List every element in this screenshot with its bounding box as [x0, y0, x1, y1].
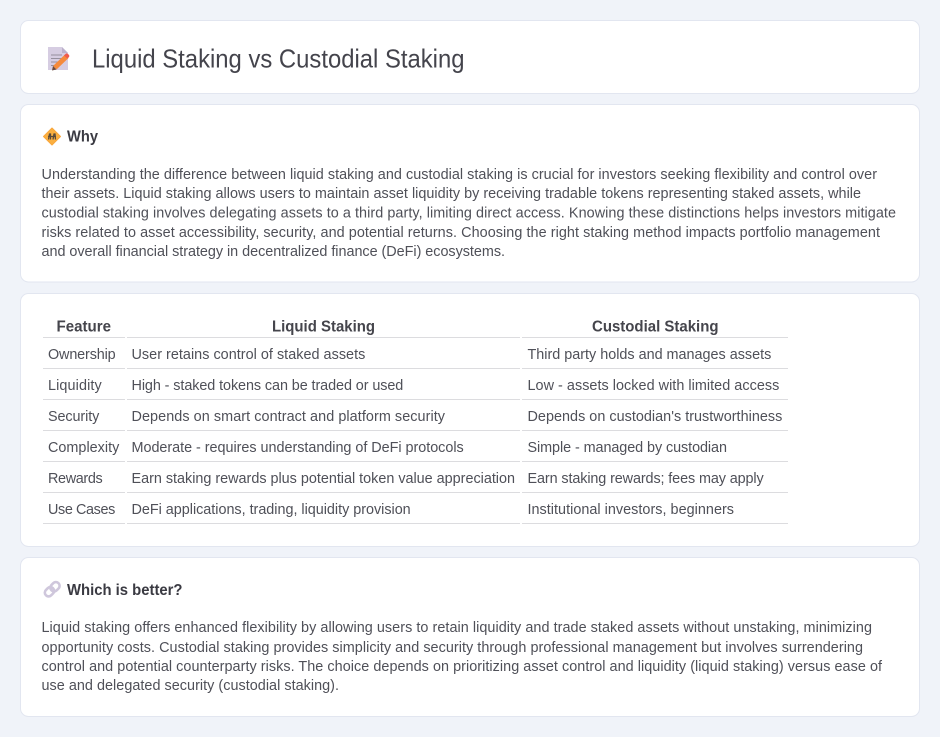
text block: which is better paragraph: opportunity costs. Custodial staking provides simplicity and security through professional management but involves surrendering [42, 640, 863, 656]
text block: why paragraph: Understanding the difference between liquid staking and custodial staking is crucial for investors seeking flexibility and control over [42, 167, 877, 183]
table row: liquidity: Liquidity [48, 378, 102, 394]
text block: why paragraph: and overall financial strategy in decentralized finance (DeFi) ecosystems. [42, 244, 505, 260]
table row: complexity [43, 440, 788, 462]
table header row: Liquid Staking [272, 318, 375, 336]
table row: liquidity [43, 378, 788, 400]
table row: security: Depends on smart contract and platform security [132, 409, 446, 425]
text block: which is better paragraph [42, 620, 883, 694]
table row: rewards: Earn staking rewards; fees may apply [528, 471, 764, 487]
table row: complexity: Complexity [48, 440, 120, 456]
icon: document with pencil [48, 47, 69, 70]
table row: use cases [43, 502, 788, 524]
table row: use cases: Use Cases [48, 502, 115, 518]
panel: why [20, 104, 920, 282]
text block: which is better paragraph: use and delegated security (custodial staking). [42, 678, 339, 694]
panel: which is better [20, 558, 920, 716]
table row: security: Security [48, 409, 100, 425]
table row: liquidity: Low - assets locked with limited access [528, 378, 779, 394]
table row: rewards [43, 471, 788, 492]
table row: ownership: Ownership [48, 347, 116, 363]
table row: security [43, 409, 788, 430]
table row: ownership: Third party holds and manages assets [528, 347, 771, 363]
panel: comparison table [20, 294, 920, 546]
icon: chain link [43, 581, 61, 598]
title: Liquid Staking vs Custodial Staking [92, 46, 464, 74]
table header row: Custodial Staking [592, 318, 718, 336]
table row: rewards: Earn staking rewards plus potential token value appreciation [132, 471, 515, 487]
table row: rewards: Rewards [48, 471, 103, 487]
text block: which is better paragraph: Liquid staking offers enhanced flexibility by allowing users to retain liquidity and trade staked assets without unstaking, minimizing [42, 620, 872, 636]
text block: why paragraph: their assets. Liquid staking allows users to maintain asset liquidity by receiving tradable tokens representing staked assets, while [42, 186, 861, 202]
text block: why paragraph [42, 167, 896, 260]
heading: which is better: Which is better? [67, 582, 182, 599]
table row: complexity: Moderate - requires understanding of DeFi protocols [132, 440, 464, 456]
table row: liquidity: High - staked tokens can be traded or used [132, 378, 403, 394]
table row: ownership: User retains control of staked assets [132, 347, 365, 363]
table row: security: Depends on custodian's trustworthiness [528, 409, 782, 425]
table row: ownership [43, 347, 788, 368]
table row: use cases: Institutional investors, beginners [528, 502, 734, 518]
panel: header [20, 20, 920, 94]
table header row [43, 318, 788, 338]
table row: use cases: DeFi applications, trading, liquidity provision [132, 502, 411, 518]
text block: why paragraph: risks related to asset accessibility, security, and potential returns. Choosing the right staking method impacts portfolio management [42, 225, 880, 241]
table header row: Feature [56, 318, 111, 336]
text block: why paragraph: custodial staking involves delegating assets to a third party, limiting direct access. Knowing these distinctions helps investors mitigate [42, 206, 896, 222]
text block: which is better paragraph: control and potential counterparty risks. The choice depends on prioritizing asset control and liquidity (liquid staking) versus ease of [42, 659, 883, 675]
table row: complexity: Simple - managed by custodian [528, 440, 727, 456]
heading: why: Why [67, 128, 98, 146]
icon: orange diamond sign [44, 128, 60, 145]
